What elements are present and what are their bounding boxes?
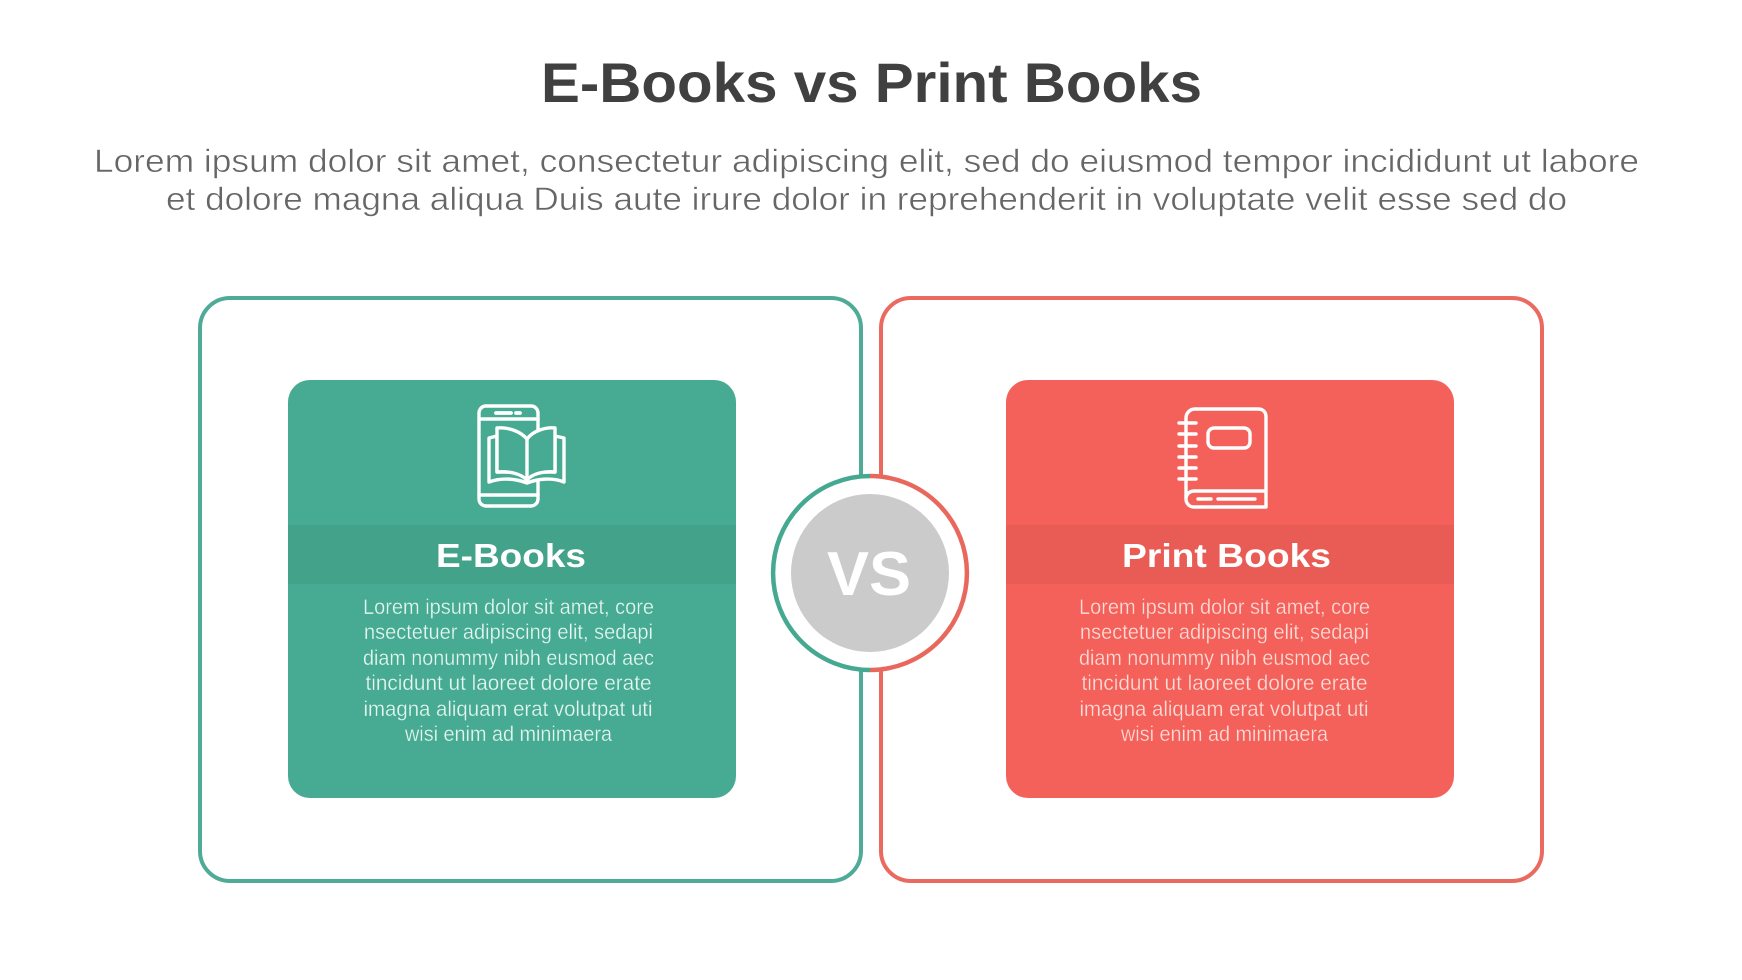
panel: print books outer frame — [881, 298, 1542, 881]
card: print books — [1006, 380, 1454, 798]
text block: e-books: imagna aliquam erat volutpat uti — [364, 698, 652, 721]
text block: e-books: Lorem ipsum dolor sit amet, core — [363, 596, 654, 619]
heading band: e-books — [288, 525, 736, 584]
text block: e-books — [363, 596, 654, 746]
text block: e-books: diam nonummy nibh eusmod aec — [363, 647, 654, 670]
heading band: print books — [1006, 525, 1454, 584]
text block: print books: tincidunt ut laoreet dolore erate — [1082, 672, 1368, 695]
text block: print books: nsectetuer adipiscing elit, sedapi — [1080, 621, 1369, 644]
text block: print books: Lorem ipsum dolor sit amet, core — [1079, 596, 1370, 619]
icon: notebook — [1179, 409, 1266, 507]
title: E-Books vs Print Books — [541, 51, 1202, 114]
card: e-books — [288, 380, 736, 798]
intro paragraph: Lorem ipsum dolor sit amet, consectetur adipiscing elit, sed do eiusmod tempor incididunt ut labore — [94, 143, 1639, 179]
text block: print books: imagna aliquam erat volutpat uti — [1080, 698, 1368, 721]
text block: e-books: tincidunt ut laoreet dolore erate — [366, 672, 652, 695]
text block: print books: wisi enim ad minimaera — [1120, 723, 1328, 746]
text block: print books — [1079, 596, 1370, 746]
heading: print books: Print Books — [1122, 537, 1331, 574]
text block: e-books: nsectetuer adipiscing elit, sedapi — [364, 621, 653, 644]
intro paragraph — [94, 143, 1639, 217]
heading: e-books: E-Books — [436, 537, 586, 574]
intro paragraph: et dolore magna aliqua Duis aute irure dolor in reprehenderit in voluptate velit esse sed do — [166, 181, 1567, 217]
panel: e-books outer frame — [200, 298, 861, 881]
text block: print books: diam nonummy nibh eusmod aec — [1079, 647, 1370, 670]
vs label: VS — [827, 540, 911, 609]
icon: phone with open book — [479, 406, 564, 506]
text block: e-books: wisi enim ad minimaera — [404, 723, 612, 746]
vs badge — [773, 476, 967, 670]
